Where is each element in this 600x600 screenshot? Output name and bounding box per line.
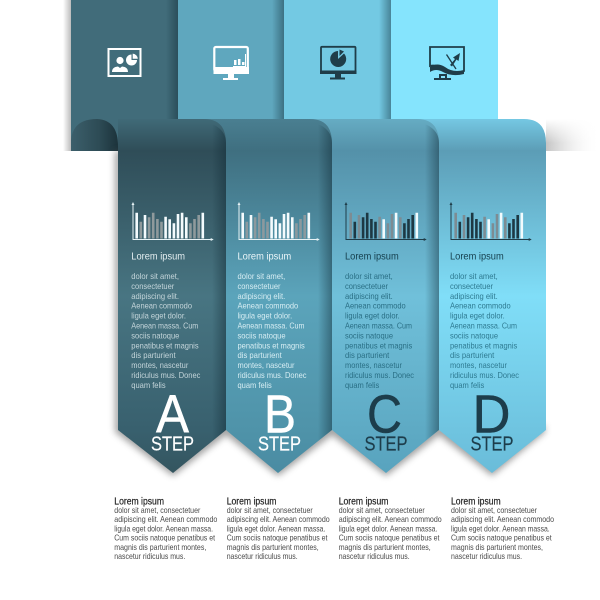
ribbon A heading: Lorem ipsum xyxy=(131,252,185,262)
ribbon B letter: B xyxy=(264,385,296,445)
ribbon D xyxy=(400,119,546,473)
top panel C xyxy=(284,0,391,119)
caption C text: ligula eget dolor. Aenean massa. xyxy=(339,524,437,533)
caption D text xyxy=(451,506,554,561)
caption D text: nascetur ridiculus mus. xyxy=(451,552,522,561)
icon: curved screen with arrow xyxy=(430,47,464,79)
ribbon D body text: ligula eget dolor. xyxy=(450,312,505,321)
caption C text xyxy=(339,506,442,561)
ribbon D letter: D xyxy=(472,385,510,445)
ribbon A body text xyxy=(131,272,200,390)
caption C text: Cum sociis natoque penatibus et xyxy=(339,534,440,543)
ribbon D body text: montes, nascetur xyxy=(450,361,507,370)
ribbon A body text: dolor sit amet, xyxy=(131,272,179,281)
ribbon B body text: ridiculus mus. Donec xyxy=(238,371,306,380)
caption A text: Cum sociis natoque penatibus et xyxy=(114,534,216,543)
ribbon D body text xyxy=(450,272,519,390)
caption B text: ligula eget dolor. Aenean massa. xyxy=(227,524,325,533)
ribbon D body text: Aenean commodo xyxy=(450,302,511,311)
ribbon B heading: Lorem ipsum xyxy=(238,252,291,262)
icon: monitor with pie chart xyxy=(320,47,356,80)
caption D text: ligula eget dolor. Aenean massa. xyxy=(451,524,550,533)
caption A text: ligula eget dolor. Aenean massa. xyxy=(114,524,213,533)
ribbon B body text xyxy=(238,272,306,390)
top panel B xyxy=(178,0,284,119)
caption A xyxy=(114,496,218,561)
ribbon B right edge shade xyxy=(318,124,332,441)
ribbon C right edge shade xyxy=(425,124,439,441)
ribbon B body text: consectetuer xyxy=(238,282,281,291)
ribbon C body text: adipiscing elit. xyxy=(345,292,393,301)
caption B xyxy=(227,496,330,561)
ribbon C body text: ligula eget dolor. xyxy=(345,312,400,321)
ribbon B xyxy=(190,119,332,473)
ribbon C body text xyxy=(345,272,414,390)
ribbon C bar chart xyxy=(344,202,427,241)
caption B text: dolor sit amet, consectetuer xyxy=(227,506,313,515)
ribbon A body xyxy=(118,119,226,473)
ribbon A body text: ridiculus mus. Donec xyxy=(131,371,200,380)
ribbon A body text: ligula eget dolor. xyxy=(131,312,186,321)
ribbon C step label: STEP xyxy=(364,434,408,456)
ribbon C body text: montes, nascetur xyxy=(345,361,402,370)
ribbon B bar chart xyxy=(238,202,320,241)
top panel D xyxy=(391,0,498,119)
caption D xyxy=(451,496,554,561)
caption A text: nascetur ridiculus mus. xyxy=(114,552,185,561)
caption D text: adipiscing elit. Aenean commodo xyxy=(451,515,554,524)
ribbon A body text: penatibus et magnis xyxy=(131,341,199,350)
ribbon C xyxy=(300,119,439,473)
caption C xyxy=(339,496,442,561)
ribbon B body text: dis parturient xyxy=(238,351,282,360)
ribbon C body text: Aenean massa. Cum xyxy=(345,322,412,330)
ribbon A body text: adipiscing elit. xyxy=(131,292,179,301)
ribbon A body text: consectetuer xyxy=(131,282,175,291)
caption A text: adipiscing elit. Aenean commodo xyxy=(114,515,218,524)
ribbon C heading: Lorem ipsum xyxy=(345,252,399,262)
ribbon D body text: adipiscing elit. xyxy=(450,292,498,301)
caption A text: dolor sit amet, consectetuer xyxy=(114,506,201,515)
caption B text: magnis dis parturient montes, xyxy=(227,543,319,552)
caption D text: dolor sit amet, consectetuer xyxy=(451,506,537,515)
ribbon D body text: Aenean massa. Cum xyxy=(450,322,517,330)
ribbon A body text: dis parturient xyxy=(131,351,176,360)
ribbon C body text: sociis natoque xyxy=(345,331,393,340)
ribbon A step label: STEP xyxy=(151,434,194,456)
ribbon B body text: Aenean commodo xyxy=(238,302,299,311)
ribbon D body text: dis parturient xyxy=(450,351,495,360)
ribbon A right edge shade xyxy=(212,124,226,441)
ribbon B step label: STEP xyxy=(258,434,301,456)
caption B heading: Lorem ipsum xyxy=(227,496,276,508)
ribbon D body xyxy=(400,119,546,473)
ribbon C body text: penatibus et magnis xyxy=(345,341,412,350)
ribbon B body xyxy=(190,119,332,473)
left fold arch xyxy=(71,119,118,151)
caption D text: Cum sociis natoque penatibus et xyxy=(451,534,552,543)
caption B text: Cum sociis natoque penatibus et xyxy=(227,534,328,543)
ribbon B body text: ligula eget dolor. xyxy=(238,312,292,321)
ribbon B body text: penatibus et magnis xyxy=(238,341,305,350)
ribbon A letter: A xyxy=(156,385,189,445)
ribbon A body text: Aenean massa. Cum xyxy=(131,322,198,330)
ribbon D body text: sociis natoque xyxy=(450,331,498,340)
caption C text: magnis dis parturient montes, xyxy=(339,543,431,552)
ribbon D body text: consectetuer xyxy=(450,282,493,291)
ribbon D bar chart xyxy=(450,202,532,241)
ribbon B body text: dolor sit amet, xyxy=(238,272,285,281)
caption A heading: Lorem ipsum xyxy=(114,496,164,508)
ribbon B body text: quam felis xyxy=(238,381,272,390)
ribbon D step label: STEP xyxy=(470,434,514,456)
caption D heading: Lorem ipsum xyxy=(451,496,501,508)
ribbon C body text: dis parturient xyxy=(345,351,390,360)
ribbon D body text: dolor sit amet, xyxy=(450,272,498,281)
shadow: right of last ribbon xyxy=(546,119,600,151)
ribbon B body text: adipiscing elit. xyxy=(238,292,285,301)
ribbon D body text: quam felis xyxy=(450,381,484,390)
ribbon C body text: consectetuer xyxy=(345,282,388,291)
ribbon A xyxy=(118,119,226,473)
caption C text: nascetur ridiculus mus. xyxy=(339,552,410,561)
caption B text: nascetur ridiculus mus. xyxy=(227,552,298,561)
ribbon D heading: Lorem ipsum xyxy=(450,252,504,262)
ribbon A body text: montes, nascetur xyxy=(131,361,189,370)
caption C text: dolor sit amet, consectetuer xyxy=(339,506,425,515)
ribbon B body text: Aenean massa. Cum xyxy=(238,322,305,330)
caption D text: magnis dis parturient montes, xyxy=(451,543,543,552)
ribbon A body text: sociis natoque xyxy=(131,331,180,340)
ribbon C body xyxy=(300,119,439,473)
shadow: left of top band xyxy=(63,0,71,151)
ribbon B body text: sociis natoque xyxy=(238,331,286,340)
ribbon D body text: penatibus et magnis xyxy=(450,341,517,350)
ribbon C body text: dolor sit amet, xyxy=(345,272,393,281)
ribbon A bar chart xyxy=(132,202,214,241)
caption B text xyxy=(227,506,330,561)
ribbon shadows xyxy=(115,151,545,476)
caption B text: adipiscing elit. Aenean commodo xyxy=(227,515,330,524)
ribbon D body text: ridiculus mus. Donec xyxy=(450,371,519,380)
ribbon C body text: ridiculus mus. Donec xyxy=(345,371,414,380)
icon: monitor with bar chart xyxy=(214,47,249,80)
ribbon C letter: C xyxy=(367,385,402,445)
ribbon C body text: Aenean commodo xyxy=(345,302,406,311)
icon: presentation with person and pie chart xyxy=(108,49,140,76)
caption C heading: Lorem ipsum xyxy=(339,496,388,508)
top panel A xyxy=(71,0,178,151)
ribbon C body text: quam felis xyxy=(345,381,379,390)
caption A text xyxy=(114,506,218,561)
caption C text: adipiscing elit. Aenean commodo xyxy=(339,515,442,524)
caption A text: magnis dis parturient montes, xyxy=(114,543,206,552)
ribbon B body text: montes, nascetur xyxy=(238,361,295,370)
ribbon A body text: Aenean commodo xyxy=(131,302,192,311)
ribbon A body text: quam felis xyxy=(131,381,166,390)
